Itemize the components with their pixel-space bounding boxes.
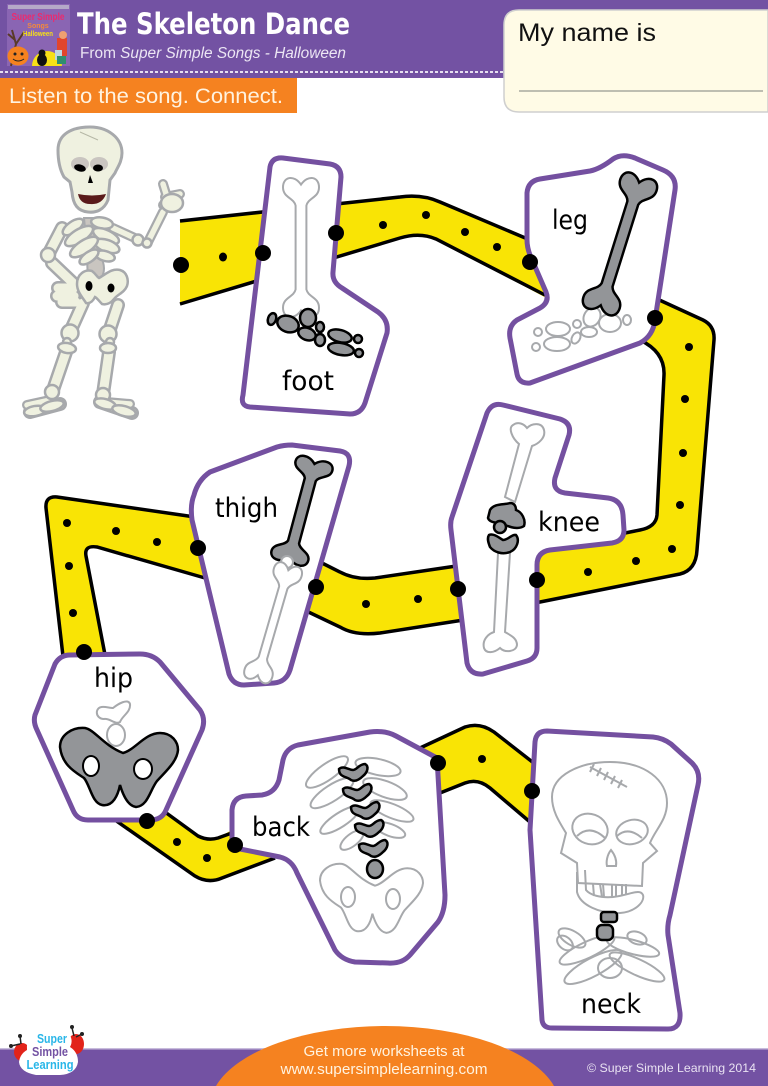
label: back	[252, 812, 310, 843]
pelvis	[77, 270, 128, 304]
icon: light pelvis	[320, 864, 423, 933]
path small dots	[63, 211, 693, 862]
title: The Skeleton Dance	[77, 7, 350, 41]
panel: hip	[34, 654, 204, 820]
icon: dark vertebrae	[339, 764, 387, 878]
album cover icon: Songs	[27, 23, 49, 30]
footer band: www.supersimplelearning.com	[279, 1062, 488, 1078]
panel: back	[232, 732, 445, 963]
album cover icon: Halloween	[23, 31, 53, 38]
panel: neck	[530, 731, 699, 1029]
logo: Learning	[26, 1057, 74, 1072]
icon: dark knee bones	[488, 503, 525, 528]
worksheets link: Get more worksheets at	[304, 1044, 464, 1060]
album cover icon: Super Simple	[12, 12, 65, 23]
name box: My name is	[518, 19, 656, 47]
panel: thigh	[191, 445, 350, 685]
skull	[58, 127, 122, 212]
instruction banner	[0, 78, 297, 113]
icon: light bones	[505, 423, 544, 502]
label: hip	[94, 663, 133, 694]
orange semicircle	[216, 1026, 554, 1086]
label: knee	[538, 507, 600, 538]
icon: light ribs	[302, 751, 416, 853]
connection dots	[76, 225, 663, 853]
icon: dark foot bones	[266, 309, 363, 357]
instruction banner: Listen to the song. Connect.	[9, 85, 283, 108]
icon: dark thigh bone	[270, 454, 334, 567]
name box	[504, 10, 768, 112]
hand	[161, 194, 183, 212]
icon: light ribs	[554, 924, 668, 990]
yellow connecting path	[46, 196, 714, 881]
icon: light vertebra	[97, 701, 130, 723]
icon: light skull	[552, 762, 667, 913]
logo	[9, 1025, 84, 1075]
ribs	[41, 216, 152, 267]
subtitle: From Super Simple Songs - Halloween	[80, 45, 346, 62]
album cover icon	[7, 4, 70, 66]
label: foot	[282, 366, 334, 397]
skeleton character	[23, 127, 183, 419]
logo: Simple	[32, 1044, 68, 1059]
icon: light shin bone	[283, 178, 319, 317]
icon: dark neck bones	[601, 912, 617, 922]
icon: hip ball	[281, 556, 293, 568]
icon: dark pelvis	[60, 728, 178, 807]
icon: light shin bone	[242, 561, 304, 685]
icon: light foot bones	[532, 304, 631, 351]
panel: foot	[242, 158, 387, 414]
label: neck	[581, 989, 641, 1020]
spine	[84, 218, 104, 280]
copyright: © Super Simple Learning 2014	[587, 1061, 756, 1075]
label: thigh	[215, 493, 278, 524]
panel: leg	[510, 156, 675, 383]
icon: dark leg bone	[581, 170, 659, 318]
knees and ankles	[23, 324, 137, 419]
logo: Super	[37, 1031, 67, 1046]
label: leg	[552, 205, 588, 236]
header band	[0, 0, 768, 78]
panel: knee	[451, 404, 624, 674]
footer band	[0, 1026, 768, 1086]
